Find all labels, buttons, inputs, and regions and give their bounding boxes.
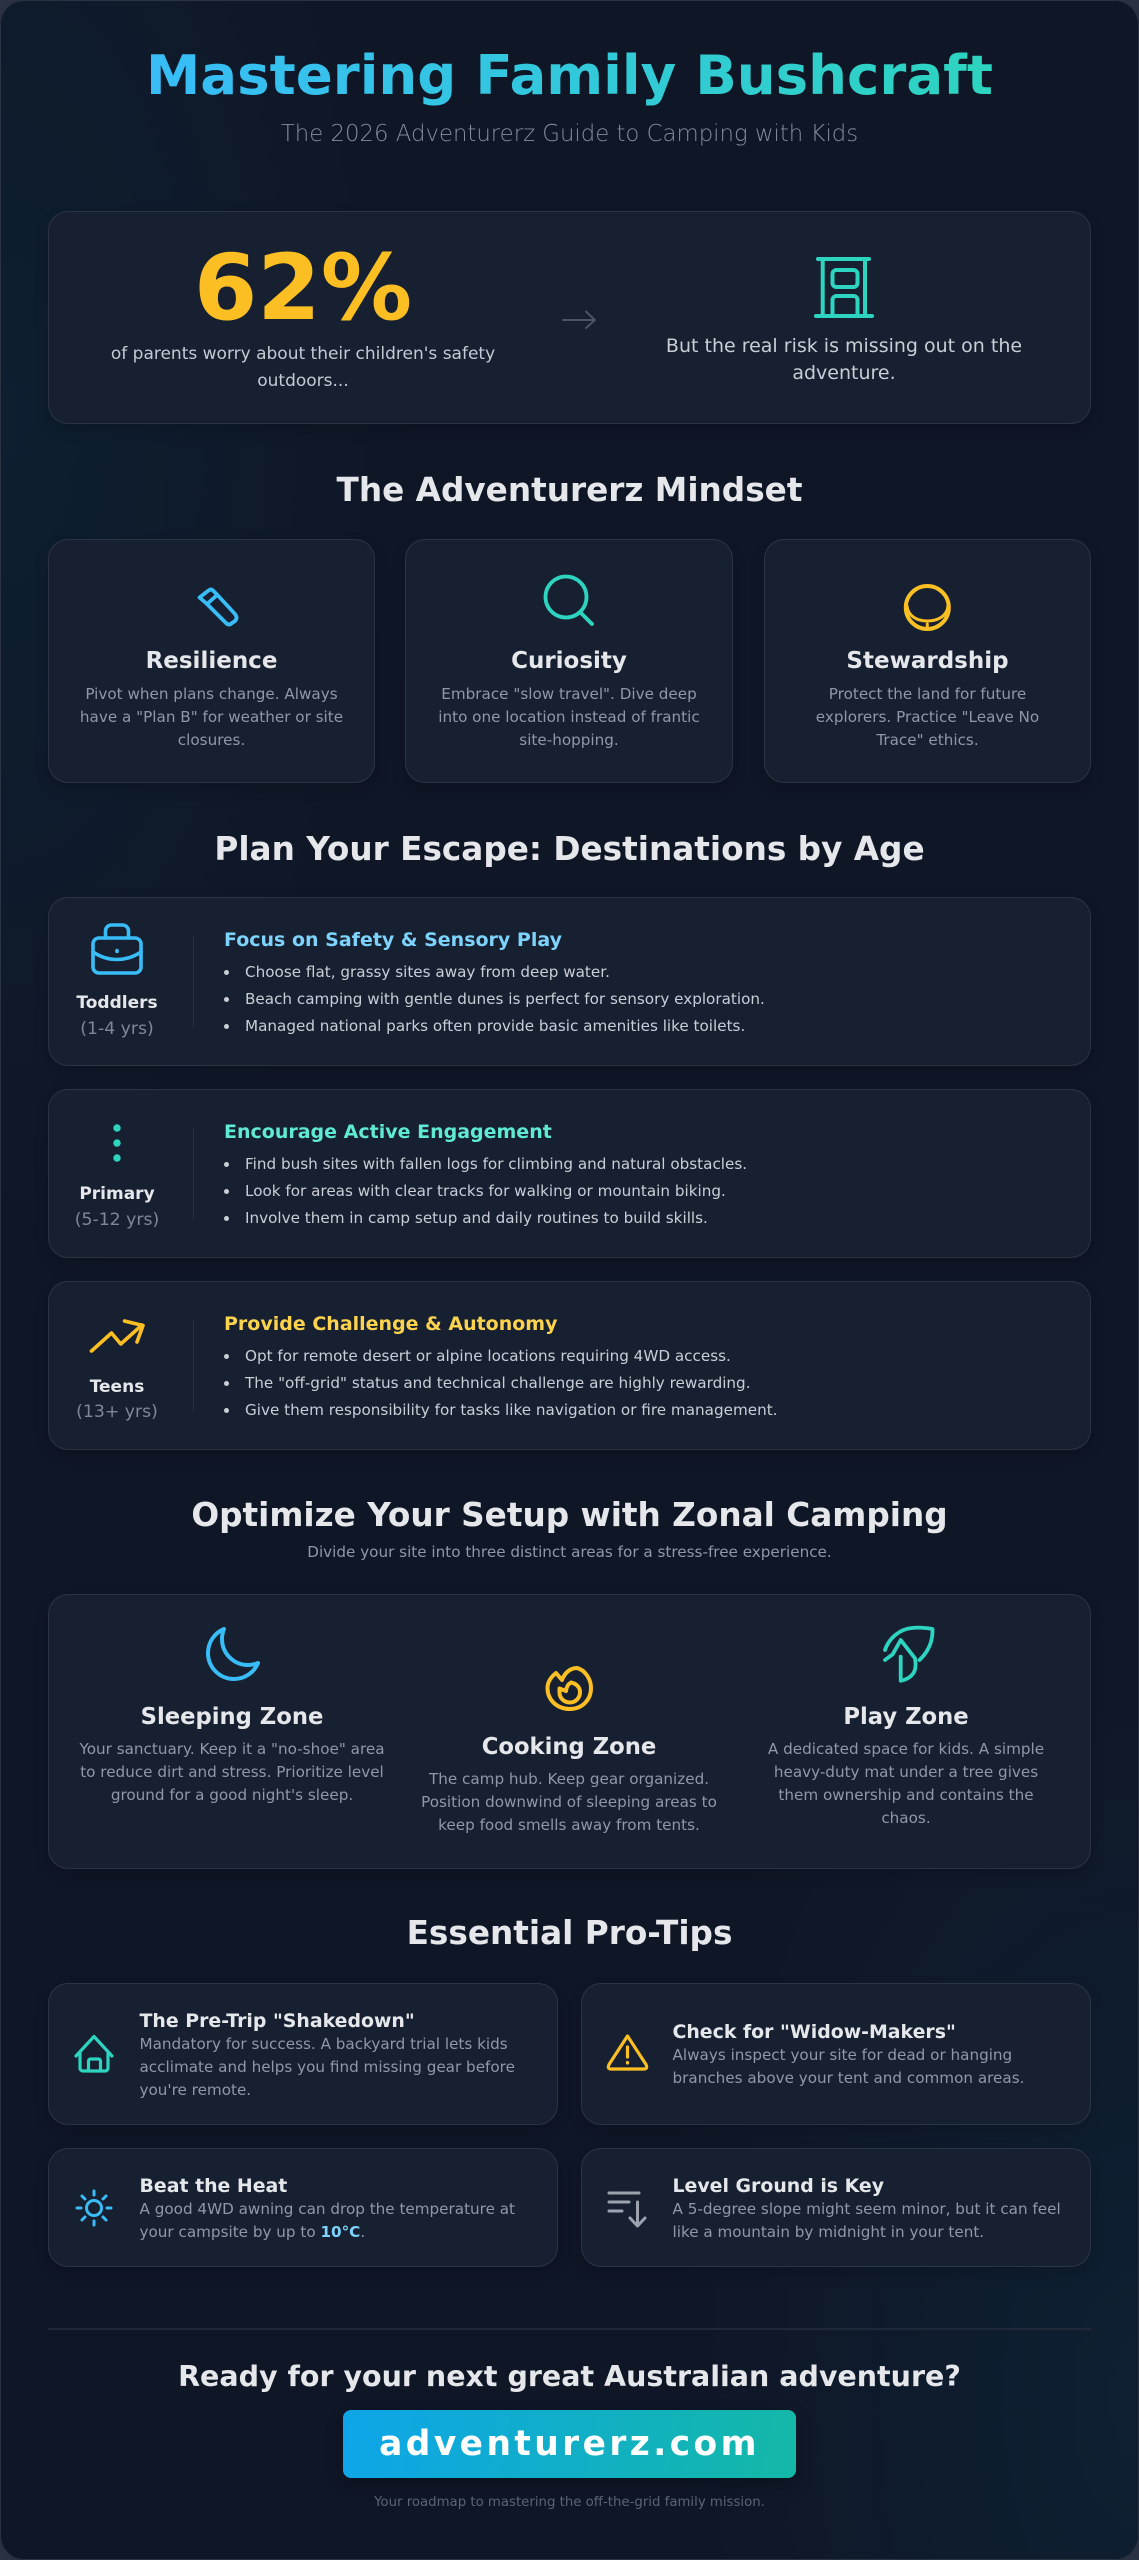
heading: pro tips: Essential Pro-Tips bbox=[407, 1914, 732, 1952]
panel: level ground tip bbox=[581, 2148, 1091, 2267]
icon: moon bbox=[206, 1627, 260, 1681]
panel: teens bbox=[48, 1281, 1091, 1450]
zone text: The camp hub. Keep gear organized. bbox=[429, 1770, 709, 1788]
icon: sun bbox=[76, 2190, 112, 2226]
tip title: Level Ground is Key bbox=[672, 2174, 884, 2196]
zone title: Cooking Zone bbox=[482, 1734, 656, 1760]
call to action button bbox=[343, 2410, 796, 2478]
tip text: your campsite by up to 10°C. bbox=[140, 2223, 365, 2241]
heading: mindset: The Adventurerz Mindset bbox=[337, 471, 802, 509]
card title: Resilience bbox=[146, 648, 277, 674]
tip text bbox=[140, 2035, 515, 2099]
zone text: A dedicated space for kids. A simple bbox=[768, 1740, 1044, 1758]
statistic caption bbox=[111, 344, 495, 391]
icon: dots bbox=[113, 1124, 121, 1162]
heading: destinations: Plan Your Escape: Destinations by Age bbox=[214, 830, 925, 868]
card text: Protect the land for future bbox=[829, 685, 1026, 703]
zone text bbox=[768, 1740, 1044, 1827]
card text: into one location instead of frantic bbox=[438, 708, 700, 726]
card text: site-hopping. bbox=[519, 731, 619, 749]
icon: fire bbox=[546, 1666, 593, 1711]
zone text: heavy-duty mat under a tree gives bbox=[774, 1763, 1038, 1781]
zone text: ground for a good night's sleep. bbox=[111, 1786, 353, 1804]
icon: arrow bbox=[562, 310, 596, 329]
panel: zones bbox=[48, 1594, 1091, 1869]
reframing caption: But the real risk is missing out on the bbox=[666, 335, 1022, 357]
call to action heading: Ready for your next great Australian adventure? bbox=[178, 2360, 961, 2393]
icon: sort descending bbox=[608, 2192, 646, 2228]
zone text: them ownership and contains the bbox=[778, 1786, 1034, 1804]
zone text bbox=[421, 1770, 717, 1834]
tips list: Find bush sites with fallen logs for climbing and natural obstacles. bbox=[245, 1155, 747, 1173]
card text: Pivot when plans change. Always bbox=[85, 685, 338, 703]
tip title: The Pre-Trip "Shakedown" bbox=[140, 2010, 415, 2032]
zone title: Play Zone bbox=[843, 1704, 969, 1730]
call to action button: adventurerz.com bbox=[379, 2424, 760, 2464]
zone text: Position downwind of sleeping areas to bbox=[421, 1793, 717, 1811]
zone text: to reduce dirt and stress. Prioritize level bbox=[80, 1763, 384, 1781]
icon: leaf bbox=[883, 1626, 934, 1683]
tip text: acclimate and helps you find missing gear before bbox=[140, 2058, 515, 2076]
tip title: Check for "Widow-Makers" bbox=[672, 2020, 956, 2042]
panel: widow-makers tip bbox=[581, 1983, 1091, 2125]
card text: Embrace "slow travel". Dive deep bbox=[441, 685, 697, 703]
tips list: Managed national parks often provide basic amenities like toilets. bbox=[245, 1017, 745, 1035]
tip text bbox=[672, 2046, 1024, 2087]
card text bbox=[80, 685, 343, 749]
icon: warning triangle bbox=[606, 2034, 648, 2071]
tip text: like a mountain by midnight in your tent. bbox=[672, 2223, 984, 2241]
panel: toddlers bbox=[48, 897, 1091, 1066]
icon: house bbox=[74, 2034, 114, 2073]
age range: (5-12 yrs) bbox=[75, 1210, 159, 1230]
age range: (13+ yrs) bbox=[76, 1402, 158, 1422]
age label: Primary bbox=[79, 1184, 155, 1204]
tip text bbox=[672, 2200, 1061, 2241]
icon: globe ring bbox=[904, 584, 951, 631]
panel: stewardship bbox=[764, 539, 1091, 783]
zone: sleeping bbox=[79, 1627, 385, 1804]
panel: hero statistic bbox=[48, 211, 1091, 424]
tips list: Opt for remote desert or alpine locations requiring 4WD access. bbox=[245, 1347, 731, 1365]
card text bbox=[438, 685, 700, 749]
tips list bbox=[224, 1155, 747, 1227]
card text: closures. bbox=[178, 731, 245, 749]
panel: shakedown tip bbox=[48, 1983, 558, 2125]
tip text: A 5-degree slope might seem minor, but it can feel bbox=[672, 2200, 1061, 2218]
footer note: Your roadmap to mastering the off-the-grid family mission. bbox=[374, 2495, 765, 2510]
tips list: Choose flat, grassy sites away from deep water. bbox=[245, 963, 610, 981]
destination heading: Encourage Active Engagement bbox=[224, 1121, 552, 1143]
zone text: chaos. bbox=[881, 1809, 931, 1827]
zone text: keep food smells away from tents. bbox=[438, 1816, 700, 1834]
zone: cooking bbox=[421, 1666, 717, 1834]
heading: zonal camping: Optimize Your Setup with Zonal Camping bbox=[191, 1496, 948, 1534]
icon: trending arrow bbox=[90, 1319, 145, 1353]
card text bbox=[816, 685, 1039, 749]
card text: explorers. Practice "Leave No bbox=[816, 708, 1039, 726]
icon: magnifier bbox=[544, 574, 594, 626]
icon: resilience bbox=[198, 588, 238, 626]
tip text bbox=[140, 2200, 515, 2241]
statistic caption: outdoors... bbox=[257, 371, 349, 391]
zone text bbox=[79, 1740, 385, 1804]
card text: have a "Plan B" for weather or site bbox=[80, 708, 343, 726]
tips list: Give them responsibility for tasks like navigation or fire management. bbox=[245, 1401, 778, 1419]
tips list: Involve them in camp setup and daily routines to build skills. bbox=[245, 1209, 708, 1227]
panel: heat tip bbox=[48, 2148, 558, 2267]
tips list: Beach camping with gentle dunes is perfect for sensory exploration. bbox=[245, 990, 765, 1008]
zone text: Your sanctuary. Keep it a "no-shoe" area bbox=[79, 1740, 385, 1758]
card title: Stewardship bbox=[846, 648, 1009, 674]
zone: play bbox=[768, 1626, 1044, 1827]
tips list: The "off-grid" status and technical challenge are highly rewarding. bbox=[245, 1374, 751, 1392]
reframing caption: adventure. bbox=[792, 362, 896, 384]
tips list bbox=[224, 1347, 778, 1419]
tip text: branches above your tent and common areas. bbox=[672, 2069, 1024, 2087]
tips list: Look for areas with clear tracks for walking or mountain biking. bbox=[245, 1182, 726, 1200]
title: Mastering Family Bushcraft bbox=[146, 43, 993, 107]
destination heading: Provide Challenge & Autonomy bbox=[224, 1313, 558, 1335]
icon: briefcase bbox=[91, 923, 143, 975]
icon: door bbox=[814, 257, 874, 318]
big number: 62% bbox=[194, 234, 412, 341]
subtitle: The 2026 Adventurerz Guide to Camping with Kids bbox=[281, 121, 858, 147]
destination heading: Focus on Safety & Sensory Play bbox=[224, 929, 562, 951]
age label: Toddlers bbox=[76, 993, 158, 1013]
tips list bbox=[224, 963, 765, 1035]
panel: curiosity bbox=[405, 539, 733, 783]
panel: primary bbox=[48, 1089, 1091, 1258]
tip text: Mandatory for success. A backyard trial lets kids bbox=[140, 2035, 508, 2053]
tip text: A good 4WD awning can drop the temperature at bbox=[140, 2200, 515, 2218]
card title: Curiosity bbox=[511, 648, 627, 674]
card text: Trace" ethics. bbox=[876, 731, 979, 749]
tip title: Beat the Heat bbox=[140, 2174, 287, 2196]
tip text: you're remote. bbox=[140, 2081, 251, 2099]
zone title: Sleeping Zone bbox=[141, 1704, 323, 1730]
panel: resilience bbox=[48, 539, 375, 783]
section intro: Divide your site into three distinct areas for a stress-free experience. bbox=[307, 1542, 832, 1560]
statistic caption: of parents worry about their children's safety bbox=[111, 344, 495, 364]
tip text: Always inspect your site for dead or hanging bbox=[672, 2046, 1012, 2064]
reframing caption bbox=[666, 335, 1022, 384]
age label: Teens bbox=[90, 1377, 144, 1397]
age range: (1-4 yrs) bbox=[80, 1019, 154, 1039]
